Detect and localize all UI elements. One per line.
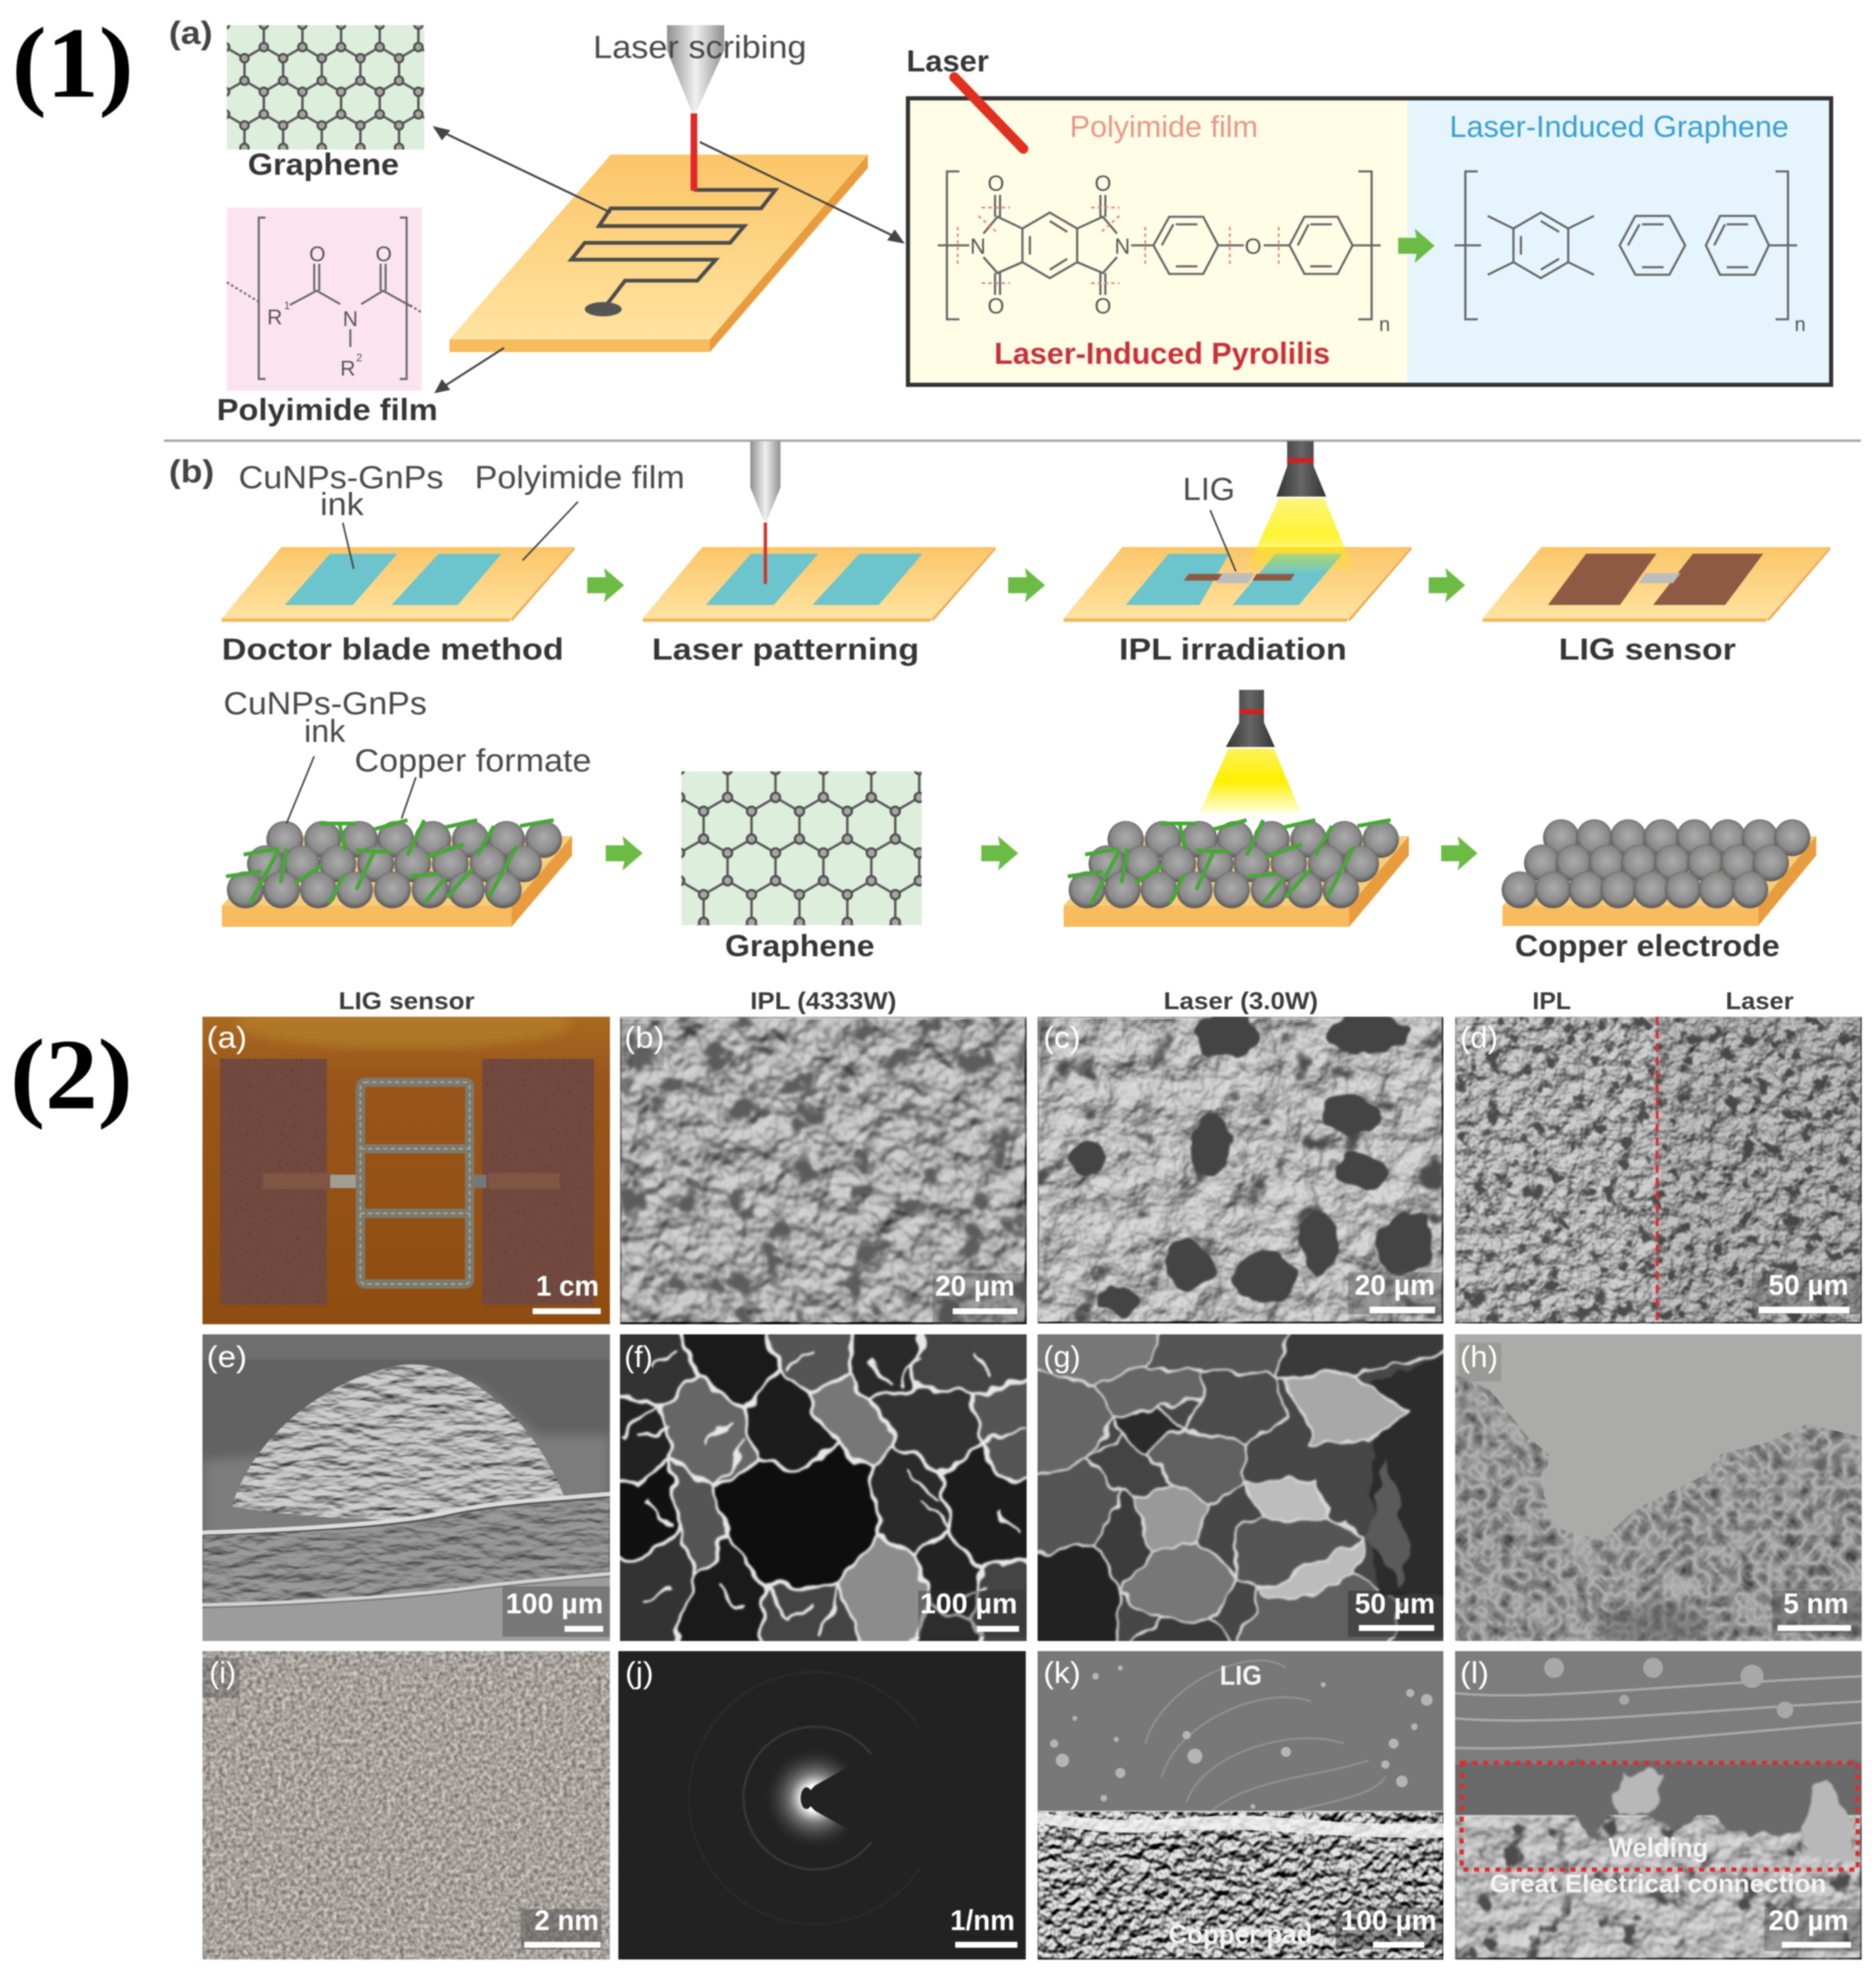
reaction box: N (970, 235, 985, 259)
step 3: IPL irradiation (1064, 441, 1411, 622)
step 1: doctor blade: Polyimide film (475, 460, 685, 496)
photo (a): LIG sensor device (202, 998, 610, 1324)
polyimide substrate with scribed pattern (449, 155, 868, 352)
photo (c): Laser SEM: 20 µm (1355, 1270, 1435, 1302)
ink coating on substrate (222, 756, 572, 927)
photo (f): porous network SEM: (f) (624, 1339, 653, 1374)
photo (k): LIG and copper pad interface (1038, 1651, 1443, 1959)
photo (i): HRTEM lattice (202, 1651, 610, 1959)
arrow to reaction box (700, 142, 905, 244)
photo (l): welding interface: 20 µm (1768, 1906, 1848, 1937)
green reaction arrow (1398, 229, 1435, 263)
arrow to copper (1441, 836, 1478, 871)
arrow to polyimide (434, 348, 504, 393)
copper electrode (1501, 819, 1816, 926)
photo (g): Laser porous SEM (1029, 1326, 1452, 1654)
photo (d): IPL and Laser boundary SEM (1455, 1017, 1862, 1323)
polyimide structure swatch: 2 (356, 351, 362, 364)
reaction box: O (1245, 235, 1262, 259)
polyimide structure swatch: R (340, 357, 355, 381)
column title Laser: Laser (1726, 988, 1794, 1015)
polyimide structure swatch (227, 208, 422, 391)
photo (l): welding interface (1455, 1651, 1862, 1959)
step 4: LIG sensor (1483, 547, 1831, 622)
arrow to IPL (981, 836, 1018, 871)
column title IPL (4333W): IPL (4333W) (750, 988, 896, 1015)
photo (g): Laser porous SEM: 50 µm (1355, 1588, 1435, 1620)
photo (k): LIG and copper pad interface: LIG (1220, 1660, 1262, 1691)
graphene molecule (1454, 171, 1797, 319)
column title LIG sensor: LIG sensor (339, 988, 475, 1015)
step 1: doctor blade: CuNPs-GnPs (239, 460, 444, 496)
graphene swatch (227, 25, 424, 150)
arrow step 2 to 3 (1008, 568, 1045, 602)
laser label: Laser (906, 44, 989, 78)
box caption laser-induced pyrolilis: Laser-Induced Pyrolilis (994, 337, 1330, 371)
copper electrode label: Copper electrode (1515, 929, 1779, 963)
photo (k): LIG and copper pad interface: (k) (1043, 1656, 1080, 1690)
photo (f): porous network SEM: 100 µm (920, 1588, 1017, 1620)
polyimide molecule (938, 171, 1380, 319)
arrow to graphene (433, 126, 611, 213)
label (a): (a) (169, 16, 213, 51)
photo (c): Laser SEM: (c) (1043, 1021, 1080, 1055)
photo (g): Laser porous SEM: (g) (1043, 1340, 1080, 1374)
box heading polyimide film: Polyimide film (1069, 110, 1258, 144)
photo (a): LIG sensor device: (a) (207, 1020, 247, 1055)
photo (d): IPL and Laser boundary SEM: (d) (1460, 1021, 1498, 1055)
photo (b): IPL SEM: 20 µm (935, 1270, 1015, 1302)
graphene swatch second (681, 771, 922, 925)
arrow step 1 to 2 (587, 568, 624, 602)
column title IPL: IPL (1532, 988, 1571, 1015)
doctor blade label: Doctor blade method (222, 632, 564, 666)
photo (e): cross-section SEM: (e) (207, 1339, 247, 1374)
laser scribing tool (667, 25, 724, 191)
laser beam (954, 77, 1023, 149)
reaction box: O (1095, 295, 1111, 318)
reaction box: O (988, 172, 1004, 196)
photo (i): HRTEM lattice: 2 nm (534, 1905, 599, 1937)
reaction box: n (1379, 313, 1390, 336)
LIG sensor label: LIG sensor (1558, 633, 1736, 666)
arrow to graphene mix (606, 836, 643, 871)
step 2: laser patterning (643, 441, 996, 622)
section number (2): (2) (10, 1018, 133, 1130)
photo (e): cross-section SEM (202, 1334, 610, 1641)
photo (e): cross-section SEM: 100 µm (506, 1588, 603, 1620)
panel divider (164, 439, 1861, 442)
photo (b): IPL SEM: (b) (624, 1020, 665, 1055)
photo (k): LIG and copper pad interface: 100 µm (1341, 1905, 1437, 1937)
polyimide structure swatch: N (343, 308, 358, 331)
polyimide structure swatch: O (376, 243, 391, 266)
photo (d): IPL and Laser boundary SEM: 50 µm (1768, 1270, 1848, 1302)
photo (k): LIG and copper pad interface: Copper pad (1169, 1919, 1312, 1949)
photo (h): TEM edge: (h) (1460, 1340, 1498, 1374)
laser patterning label: Laser patterning (652, 632, 919, 666)
photo (i): HRTEM lattice: (i) (209, 1655, 236, 1690)
photo (j): SAED pattern (618, 1651, 1026, 1959)
laser scribing label: Laser scribing (593, 30, 807, 66)
reaction box: N (1115, 235, 1130, 259)
step 1: doctor blade: ink (320, 487, 365, 523)
IPL irradiation label: IPL irradiation (1119, 633, 1347, 666)
photo (h): TEM edge (1455, 1334, 1862, 1654)
polyimide film label: Polyimide film (217, 392, 438, 427)
box heading laser-induced graphene: Laser-Induced Graphene (1449, 110, 1789, 144)
reaction box: O (988, 295, 1004, 318)
label (b): (b) (169, 455, 214, 490)
photo (l): welding interface: Welding (1609, 1833, 1708, 1863)
polyimide structure swatch: 1 (284, 299, 290, 312)
graphene label: Graphene (248, 147, 399, 181)
photo (h): TEM edge: 5 nm (1784, 1589, 1848, 1620)
step 3: IPL irradiation: LIG (1183, 471, 1235, 507)
column title Laser (3.0W): Laser (3.0W) (1164, 988, 1318, 1015)
reaction box: n (1795, 313, 1805, 336)
photo (l): welding interface: (l) (1460, 1656, 1489, 1690)
ink label: CuNPs-GnPs (223, 686, 427, 722)
polyimide structure swatch: R (267, 306, 282, 329)
polyimide structure swatch: O (309, 243, 325, 266)
photo (b): IPL SEM (620, 1017, 1027, 1324)
copper formate label: Copper formate (355, 744, 591, 779)
photo (a): LIG sensor device: 1 cm (536, 1270, 599, 1302)
photo (l): welding interface: Great Electrical connection (1490, 1869, 1826, 1898)
step 1: doctor blade (222, 460, 685, 622)
photo (j): SAED pattern: (j) (625, 1655, 654, 1690)
graphene label second: Graphene (725, 928, 875, 963)
ink label second line: ink (304, 714, 346, 750)
reaction box (908, 98, 1831, 385)
section number (1): (1) (12, 7, 134, 118)
reaction box: O (1095, 172, 1111, 196)
IPL sintering (1064, 690, 1409, 927)
arrow step 3 to 4 (1429, 568, 1465, 602)
photo (j): SAED pattern: 1/nm (950, 1905, 1015, 1937)
photo (f): porous network SEM (603, 1318, 1040, 1654)
photo (c): Laser SEM (1038, 1010, 1443, 1323)
